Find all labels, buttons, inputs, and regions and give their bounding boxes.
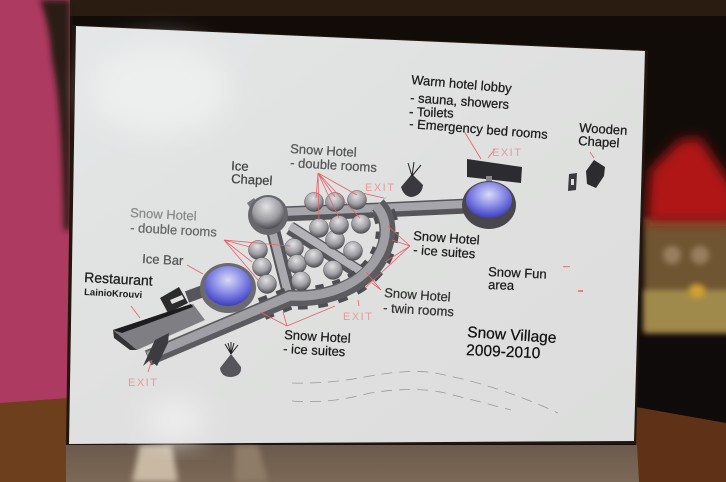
label: wooden chapel: [578, 120, 628, 151]
label: snow hotel ice suites south: [283, 327, 351, 359]
dashed path lines: [292, 371, 558, 413]
label: snow hotel double rooms west: Snow Hotel: [130, 205, 197, 223]
label: snow hotel ice suites east: Snow Hotel: [413, 228, 480, 248]
label: restaurant: LainioKrouvi: [84, 287, 142, 301]
label: snow hotel twin rooms: Snow Hotel: [384, 285, 451, 305]
heading: warm hotel lobby: [409, 72, 549, 142]
background: wooden table: [0, 398, 726, 482]
red marks: [563, 266, 583, 292]
label: snow hotel twin rooms: - twin rooms: [383, 300, 455, 319]
leader lines: [131, 131, 594, 372]
label: wooden chapel: Wooden: [579, 120, 628, 138]
icon: wooden chapel: [568, 160, 605, 191]
heading: warm hotel lobby: - Toilets: [409, 104, 454, 121]
label: snow hotel double rooms north: [290, 141, 378, 175]
label: snow fun area: Snow Fun: [488, 264, 547, 282]
label: snow hotel twin rooms: [383, 285, 455, 319]
label: snow hotel ice suites south: Snow Hotel: [284, 327, 351, 346]
icon: tipi south: [220, 342, 241, 377]
title: snow village: 2009-2010: [466, 342, 541, 362]
panel: printed map sheet: [66, 25, 648, 445]
label: snow hotel double rooms west: - double rooms: [130, 220, 218, 240]
label: restaurant: Restaurant: [84, 269, 153, 289]
label: restaurant: [84, 269, 153, 301]
heading: warm hotel lobby: - sauna, showers: [410, 90, 510, 112]
label: ice bar: Ice Bar: [142, 251, 184, 268]
map: ice bar dome: [200, 263, 256, 313]
heading: warm hotel lobby: - Emergency bed rooms: [409, 116, 549, 142]
map: ice chapel dome: [247, 195, 288, 235]
label: ice chapel: Ice: [231, 158, 249, 174]
title: snow village: [466, 324, 557, 362]
label: snow hotel ice suites south: - ice suites: [283, 341, 346, 359]
exit labels: EXIT: [365, 182, 395, 194]
exit labels: EXIT: [492, 147, 522, 159]
label: snow hotel double rooms west: [130, 205, 218, 240]
icon: tipi north: [401, 162, 423, 197]
map: lobby dome and building: [462, 159, 522, 229]
exit labels: EXIT: [343, 311, 373, 323]
title: snow village: Snow Village: [467, 324, 557, 347]
map: corridors: [148, 204, 468, 358]
background: person in pink: [0, 0, 70, 405]
heading: warm hotel lobby: Warm hotel lobby: [411, 72, 513, 96]
label: wooden chapel: Chapel: [578, 133, 620, 151]
label: snow hotel double rooms north: - double rooms: [290, 155, 378, 175]
exit labels: [128, 147, 522, 389]
label: ice chapel: [231, 158, 273, 188]
label: snow fun area: area: [488, 277, 515, 293]
background: red lamp and shelf: [644, 138, 726, 333]
exit labels: EXIT: [128, 377, 158, 389]
label: ice chapel: Chapel: [231, 171, 273, 188]
map: restaurant building: [113, 287, 205, 366]
label: snow hotel ice suites east: - ice suites: [413, 242, 476, 261]
map: snow hotel rooms: [248, 190, 370, 294]
label: snow hotel ice suites east: [413, 228, 480, 261]
label: snow fun area: [488, 264, 547, 293]
label: snow hotel double rooms north: Snow Hotel: [290, 141, 357, 160]
